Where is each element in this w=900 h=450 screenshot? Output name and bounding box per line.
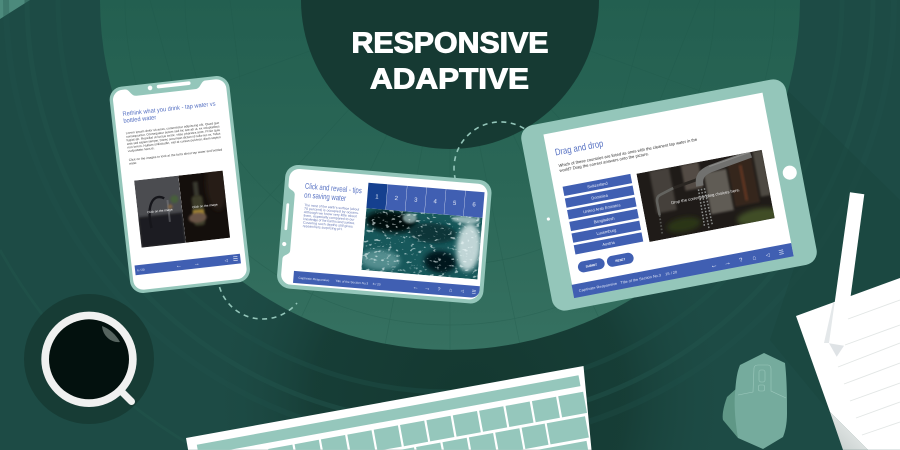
phone nav bar: ←	[176, 263, 182, 270]
under sheet	[830, 412, 868, 450]
landscape nav bar: 6 / 20	[373, 282, 381, 287]
mouse button lines	[738, 365, 786, 398]
keyboard	[186, 366, 592, 450]
landscape nav bar: Title of the Section No.3	[335, 279, 369, 286]
tablet nav bar	[572, 243, 794, 298]
tablet body	[519, 77, 819, 313]
phone body text: vulputate lacus.	[128, 146, 155, 153]
reveal tabs: 5	[453, 201, 457, 207]
landscape body text: them, especially compared to our	[303, 214, 355, 222]
answer list: Luxemburg	[596, 227, 617, 236]
landscape heading	[304, 182, 362, 204]
keyboard frame	[186, 366, 592, 450]
answer list: Bangladesh	[593, 216, 615, 224]
phone nav bar: ◁	[224, 258, 229, 263]
top sheet	[796, 278, 900, 450]
landscape phone camera	[282, 242, 287, 246]
answer list: Austria	[602, 240, 616, 247]
tablet nav bar: ←	[710, 262, 718, 270]
answer list	[563, 174, 643, 254]
phone body text: Lorem ipsum dolor sit amet, consectetur adipiscing elit. Quad quo	[126, 121, 220, 135]
title	[352, 27, 548, 96]
phone screen	[112, 78, 248, 291]
reveal tabs	[366, 183, 485, 218]
dark title circle	[301, 0, 599, 149]
tap photo	[636, 149, 782, 245]
ocean photo	[359, 208, 483, 280]
cup shadow disc	[24, 294, 154, 424]
submit button: SUBMIT	[585, 263, 598, 269]
landscape body text	[303, 203, 359, 232]
landscape heading: Click and reveal - tips	[305, 182, 362, 195]
dashed connector: landscape phone to tablet	[454, 122, 525, 180]
tablet question: Which of these countries are listed as ones with the cleanest tap water in the	[558, 137, 698, 168]
landscape nav bar: ←	[412, 285, 419, 291]
computer mouse	[723, 353, 787, 449]
reveal tabs: 4	[433, 199, 438, 205]
landscape nav bar	[293, 271, 480, 298]
landscape body text: Although we know very little about	[304, 210, 357, 218]
phone nav bar: 6 / 20	[137, 268, 145, 272]
reset button	[606, 252, 635, 268]
reset button: RESET	[615, 257, 626, 263]
phone body text: fugiat ab. Repellat ut luctus tortor, vitae pharetra ante. Proin quis	[126, 128, 221, 142]
tablet camera	[546, 217, 550, 221]
dashed connector: phone to landscape phone	[220, 287, 297, 319]
landscape nav bar: ◁	[461, 288, 465, 293]
landscape body text: The most of the earth's surface (about	[304, 203, 359, 212]
tablet nav bar: Title of the Section No.3	[620, 273, 661, 285]
cup handle	[122, 392, 132, 402]
landscape body text: knowledge of the Earth's land surface.	[303, 217, 355, 225]
title: ADAPTIVE	[370, 64, 529, 96]
reveal tabs: 3	[414, 198, 418, 204]
phone body text: non lorem. Nullam sollicitudin, nisl at cursus pulvinar, diam sapien	[127, 135, 221, 150]
landscape nav bar: ?	[437, 287, 441, 293]
coffee highlight	[102, 326, 120, 342]
landscape nav bar: →	[424, 286, 430, 292]
tablet nav bar: ☰	[778, 249, 785, 257]
photo captions: Click on the image	[147, 207, 173, 214]
keyboard top strip	[197, 375, 581, 450]
ruled lines	[838, 300, 900, 435]
phone body text: consequuntur. Consequatur autem sed hic iste ab ut, ex voluptatibus	[126, 124, 220, 139]
photo captions	[147, 202, 218, 214]
tablet nav bar: ⌂	[752, 254, 757, 262]
landscape phone speaker	[284, 203, 289, 230]
phone speaker	[157, 81, 191, 89]
landscape body text: researchers surprising pH.	[303, 224, 343, 231]
landscape body text: 70 percent) is occupied by oceans.	[304, 207, 359, 215]
answer list: Dominica	[591, 192, 609, 201]
tablet nav bar: →	[723, 259, 732, 267]
title: RESPONSIVE	[352, 27, 548, 59]
keys row 2	[400, 416, 589, 450]
landscape phone body	[276, 164, 493, 304]
paper notes	[796, 192, 900, 450]
mouse side wing	[723, 388, 738, 438]
submit button	[577, 257, 606, 273]
tablet home button	[782, 164, 798, 181]
photo: bottle	[178, 170, 230, 243]
keys row 1	[268, 392, 587, 450]
mouse main body	[735, 353, 787, 449]
tablet screen	[543, 93, 794, 298]
reveal tabs: 6	[472, 202, 477, 209]
tablet nav bar: 15 / 20	[665, 270, 677, 276]
pen shadow	[824, 303, 838, 343]
phone body	[108, 75, 251, 294]
reveal tabs: 2	[394, 196, 399, 202]
tablet	[519, 77, 819, 313]
landscape nav bar: ⌂	[449, 288, 452, 294]
coffee	[49, 319, 129, 399]
phone body text: ante sed sapien semper. Donec accumsan dictum id nulla nec ex. Tellus	[127, 131, 221, 146]
phone body text	[126, 121, 223, 166]
landscape nav bar: Captivate Responsive	[298, 276, 330, 282]
landscape phone screen	[280, 168, 488, 300]
landscape nav bar: ☰	[471, 289, 477, 296]
phone heading: bottled water	[123, 114, 157, 125]
phone heading	[122, 101, 217, 125]
phone landscape	[276, 164, 493, 304]
tablet nav bar: Captivate Responsive	[578, 282, 618, 293]
phone camera	[148, 85, 153, 90]
tablet nav bar: ?	[739, 258, 744, 264]
tablet heading: Drag and drop	[554, 139, 604, 158]
landscape body text: Covering such depths still gives	[303, 221, 353, 229]
keys row 3	[537, 441, 588, 450]
phone body text: Click on the images to look at the facts about tap water and bottled	[129, 148, 223, 162]
tablet nav bar: ◁	[765, 252, 770, 259]
big central circle	[100, 0, 800, 350]
cup rim	[41, 312, 137, 407]
landscape heading: on saving water	[304, 191, 347, 203]
phone nav bar: ☰	[232, 255, 239, 263]
phone heading: Rethink what you drink - tap water vs	[122, 101, 216, 118]
photo captions: Click on the image	[192, 202, 218, 209]
tablet question: world? Drag the correct answers onto the picture.	[559, 151, 649, 173]
phone body text: water.	[129, 161, 137, 166]
answer list: United Arab Emirates	[583, 202, 621, 214]
reveal tabs: 1	[375, 194, 379, 201]
phone nav bar	[135, 254, 241, 275]
pen tip	[829, 343, 844, 357]
phone nav bar: →	[193, 261, 200, 268]
answer list: Switzerland	[587, 181, 608, 189]
photo: tap	[134, 176, 186, 248]
tap photo: Drop the corresponding choices here.	[671, 187, 740, 205]
phone portrait	[108, 75, 251, 294]
pen	[829, 192, 864, 346]
coffee cup	[24, 294, 154, 424]
